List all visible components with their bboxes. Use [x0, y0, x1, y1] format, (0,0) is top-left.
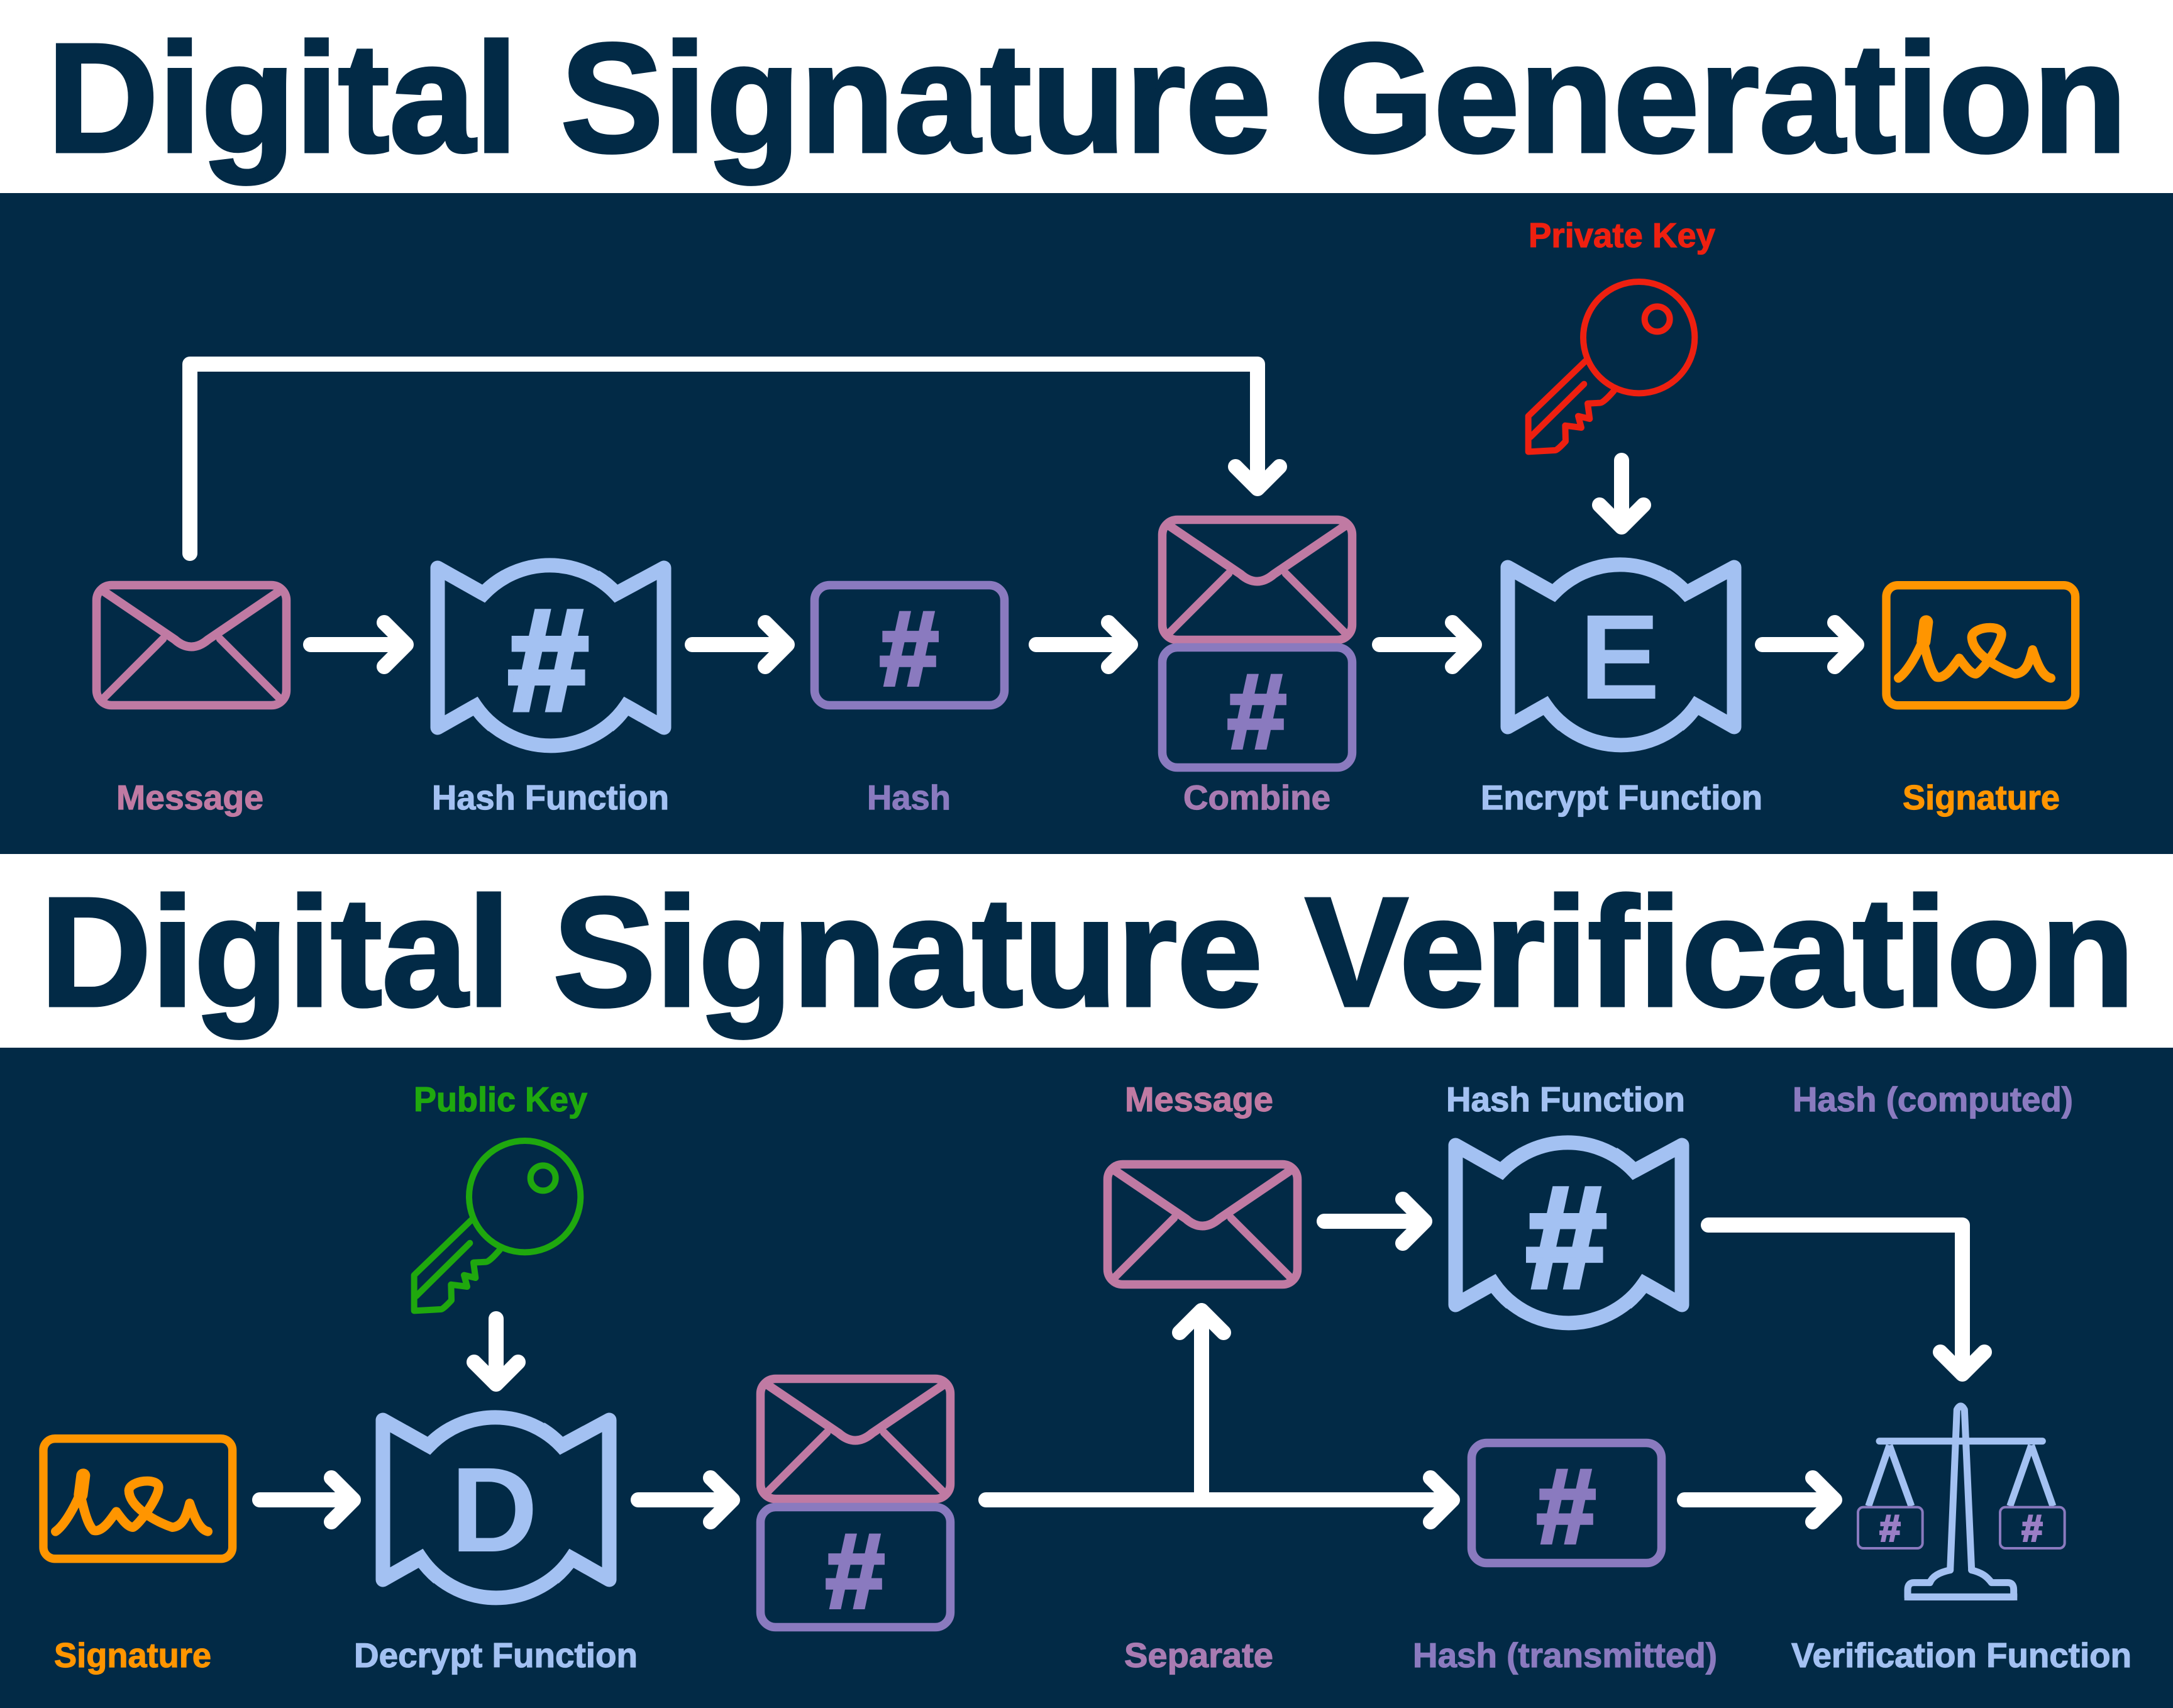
label: Private Key: Private Key: [1529, 216, 1715, 255]
arrow: private key to encrypt function: [1600, 460, 1644, 527]
arrow: separate to message: [1180, 1311, 1224, 1500]
label: Hash (transmitted): Hash (transmitted): [1413, 1636, 1717, 1675]
icon: decrypt function: [383, 1417, 609, 1598]
icon: message envelope: [97, 585, 287, 706]
icon: verification scale: #: [2021, 1507, 2042, 1549]
icon: message envelope: [1108, 1165, 1298, 1284]
icon: hash box: [815, 585, 1005, 707]
arrow: hash to combine: [1036, 623, 1131, 667]
label: Message: Message: [1125, 1080, 1273, 1119]
icon: hash transmitted box: #: [1537, 1447, 1596, 1565]
icon: encrypt function: E: [1579, 589, 1660, 724]
label: Message: Message: [116, 778, 263, 817]
arrow: hash transmitted to verification: [1684, 1478, 1835, 1522]
arrow: encrypt function to signature: [1762, 623, 1857, 667]
icon: combined envelope and hash: #: [826, 1512, 885, 1630]
arrow: message to hash function: [1324, 1199, 1425, 1243]
arrow: separate to hash transmitted: [986, 1478, 1452, 1522]
arrow: message to hash function: [311, 623, 406, 667]
icon: decrypt function: D: [451, 1442, 538, 1577]
arrow: decrypt function to combined: [638, 1478, 733, 1522]
icon: hash function: #: [1527, 1158, 1606, 1317]
icon: hash transmitted box: [1471, 1443, 1661, 1565]
arrow: signature to decrypt function: [260, 1478, 353, 1522]
label: Signature: Signature: [54, 1636, 211, 1675]
icon: public key: [414, 1141, 580, 1311]
label: Verification Function: Verification Function: [1791, 1636, 2132, 1675]
panel: signature generation: [0, 193, 2173, 854]
icon: encrypt function: [1508, 565, 1734, 745]
icon: private key: [1529, 282, 1695, 452]
icon: combined envelope and hash: [1162, 519, 1352, 770]
label: Decrypt Function: Decrypt Function: [354, 1636, 638, 1675]
label: Public Key: Public Key: [414, 1080, 587, 1119]
label: Hash Function: Hash Function: [432, 778, 669, 817]
icon: combined envelope and hash: #: [1227, 652, 1286, 770]
icon: verification scale: [1858, 1406, 2065, 1597]
label: Signature: Signature: [1903, 778, 2060, 817]
title: Digital Signature Verification: Digital Signature Verification: [40, 865, 2135, 1039]
arrow: message to combine: [190, 364, 1280, 553]
label: Separate: Separate: [1124, 1636, 1273, 1675]
arrow: combine to encrypt function: [1380, 623, 1474, 667]
label: Hash Function: Hash Function: [1446, 1080, 1685, 1119]
label: Hash (computed): Hash (computed): [1793, 1080, 2073, 1119]
icon: verification scale: #: [1879, 1507, 1900, 1549]
title: Digital Signature Generation: Digital Signature Generation: [47, 11, 2127, 185]
icon: signature: [43, 1439, 233, 1559]
icon: hash function: [1456, 1143, 1682, 1323]
icon: combined envelope and hash: [761, 1378, 951, 1630]
icon: signature: [1886, 585, 2076, 706]
label: Encrypt Function: Encrypt Function: [1481, 778, 1762, 817]
arrow: hash computed to verification: [1708, 1225, 1984, 1374]
icon: hash function: [438, 565, 664, 746]
icon: hash function: #: [509, 580, 588, 740]
label: Combine: Combine: [1183, 778, 1330, 817]
icon: hash box: #: [880, 589, 939, 707]
arrow: public key to decrypt function: [474, 1319, 518, 1384]
label: Hash: Hash: [867, 778, 951, 817]
arrow: hash function to hash: [692, 623, 787, 667]
panel: signature verification: [0, 1048, 2173, 1708]
